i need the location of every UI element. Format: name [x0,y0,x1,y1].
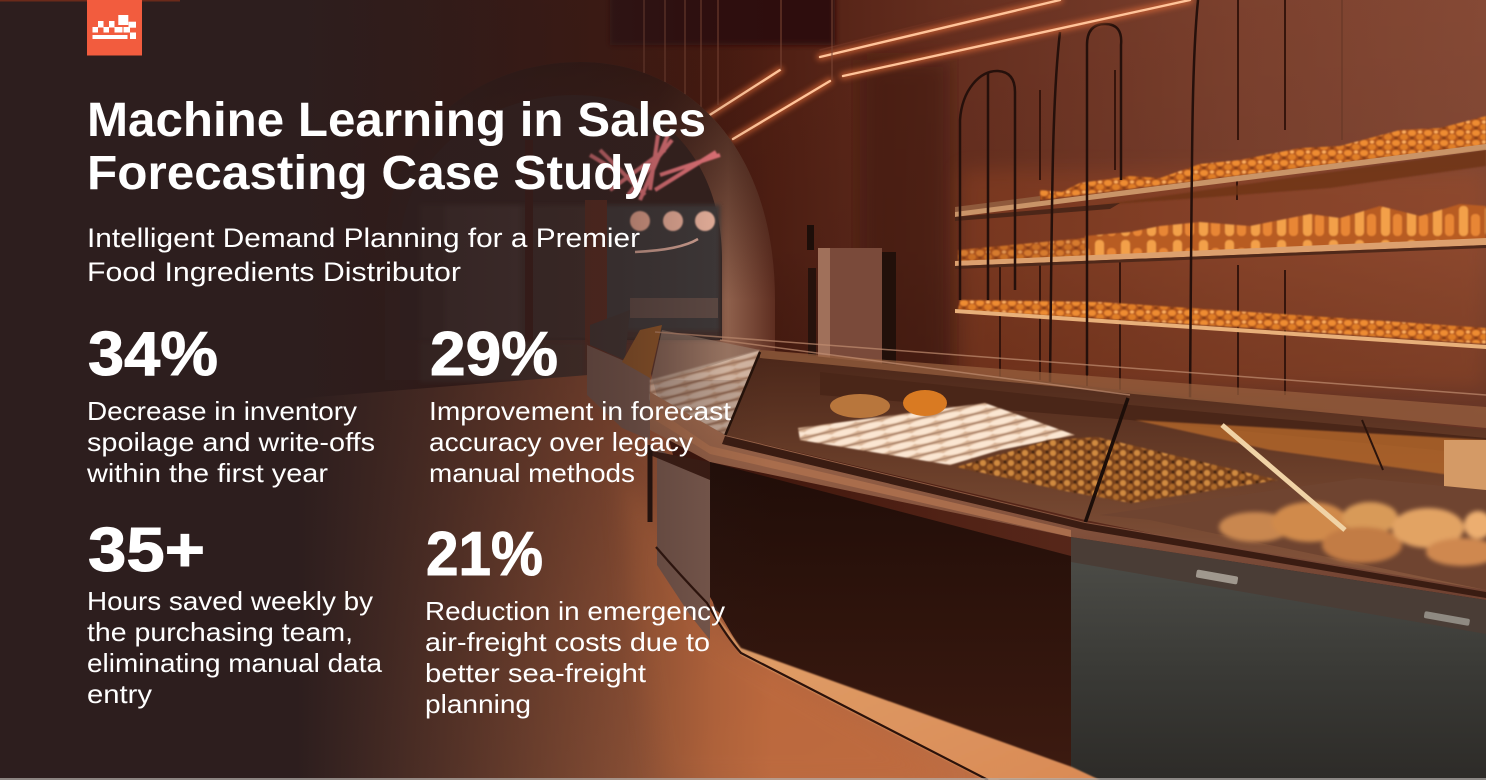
shelf 1 [955,116,1486,221]
stat: 34%: Decrease in inventory [87,396,357,426]
stat: 21%: Reduction in emergency [425,596,725,626]
stat: 21%: air-freight costs due to [425,627,710,657]
bottom edge line [0,778,1486,780]
pendant lights [630,211,715,231]
stat: 34%: within the first year [86,458,328,488]
stat: 29%: Improvement in forecast [429,396,732,426]
stat: 34%: spoilage and write-offs [87,427,375,457]
stat: 21% [425,520,725,719]
top edge line [0,0,180,2]
stat: 35+: Hours saved weekly by [87,586,373,616]
round pastries [903,390,947,416]
shelves with pastries [955,116,1486,349]
refrigerator [807,225,896,382]
main case interior [725,350,1486,600]
underglow strip [712,610,1100,780]
stat: 21%: better sea-freight [425,658,647,688]
dark front panel [710,462,1071,767]
stat: 29%: accuracy over legacy [429,427,693,457]
tray and bread [1100,478,1486,590]
stat: 35+: eliminating manual data [87,648,383,678]
left glass case [650,350,760,435]
top glass rail [655,332,1486,395]
dividers [1082,398,1128,532]
counter rail [650,392,1486,600]
side counter [587,345,710,640]
display counter [590,310,1486,780]
title: Machine Learning in Sales [87,94,706,147]
subtitle: Intelligent Demand Planning for a Premier [87,223,640,253]
stat: 35+: entry [87,679,152,709]
shelf 3 [955,300,1486,349]
logo [87,0,142,56]
stat: 21%: 21% [426,520,543,589]
white pastries [798,403,1075,465]
stat: 35+: the purchasing team, [87,617,353,647]
stat: 34%: 34% [88,320,218,389]
subtitle [87,223,640,287]
panel badges [1196,569,1470,626]
stat: 29%: 29% [430,320,558,389]
stat: 35+ [87,516,383,709]
wall grooves [1000,0,1342,400]
nuts [956,437,1278,503]
floor [280,370,1000,780]
stat: 21%: planning [425,689,531,719]
metal rods and arches [960,0,1198,400]
title [87,94,706,200]
light strips [680,0,1190,139]
stat: 29% [429,320,732,488]
subtitle: Food Ingredients Distributor [87,257,461,287]
shelf 2 [955,204,1486,269]
neon fan [590,135,720,200]
title: Forecasting Case Study [87,147,651,200]
stat: 29%: manual methods [429,458,635,488]
hanging wires [644,0,832,115]
stat: 35+: 35+ [88,516,205,585]
arched doorway [385,62,775,382]
back case glow [850,378,1045,415]
back wall [280,0,1486,560]
stat: 34% [86,320,375,488]
gray front panel [1071,560,1486,780]
